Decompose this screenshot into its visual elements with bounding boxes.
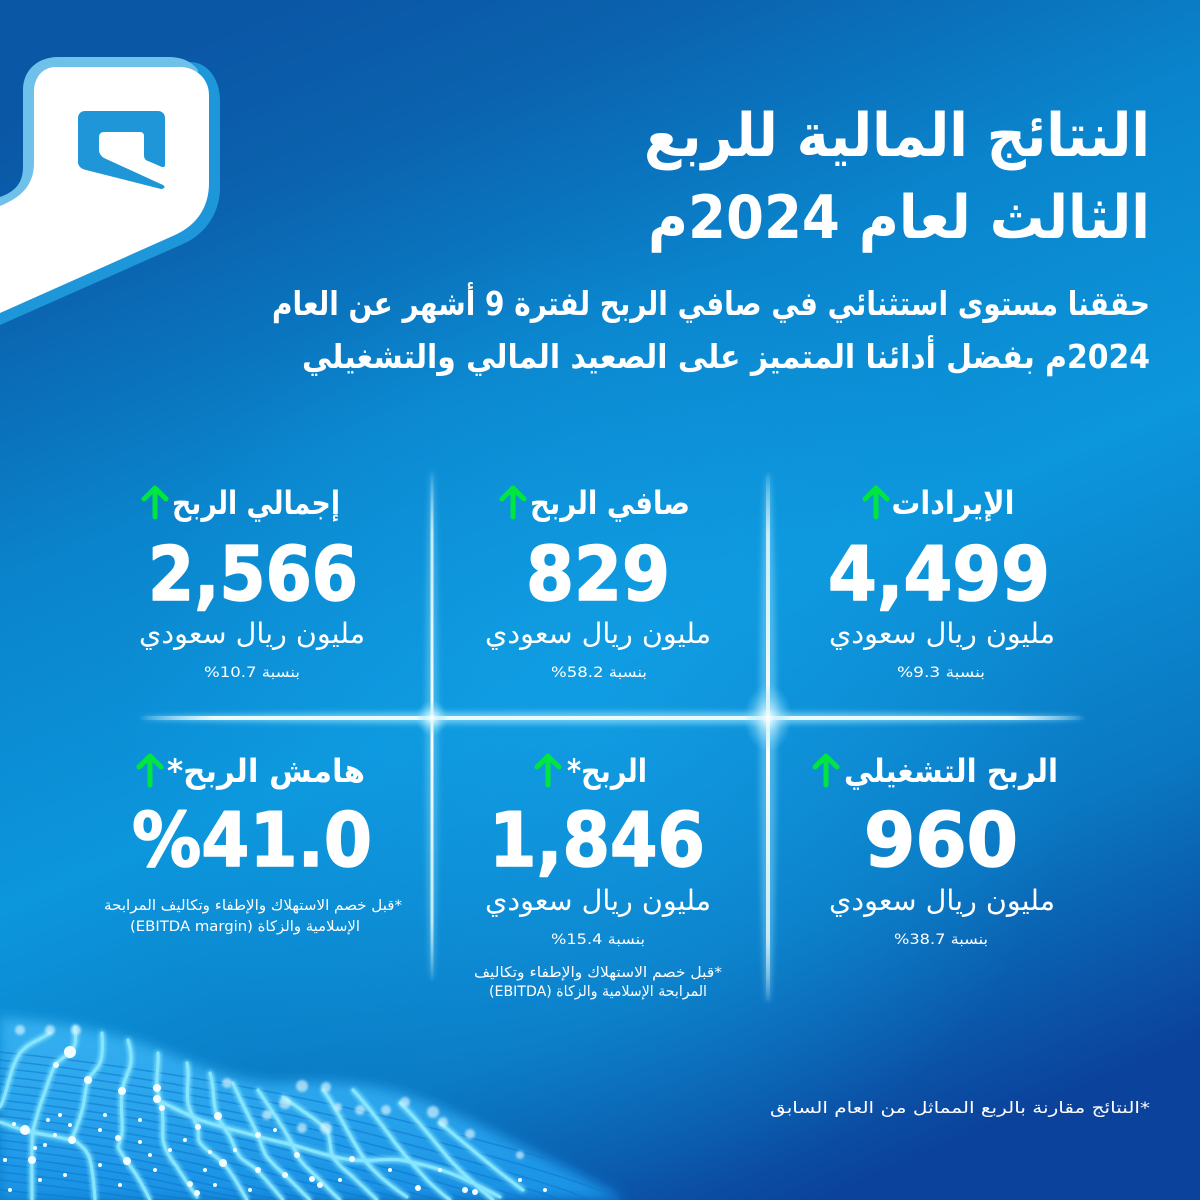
panel: EBITDA xyxy=(474,752,722,1000)
panel: EBITDA: مليون ريال سعودي xyxy=(485,884,711,917)
icon: up arrow xyxy=(537,756,559,785)
panel: net profit: صافي الربح xyxy=(530,484,690,522)
bottom note: *النتائج مقارنة بالربع المماثل من العام السابق xyxy=(770,1098,1150,1118)
panel: net profit: مليون ريال سعودي xyxy=(485,617,711,650)
panel: gross profit: مليون ريال سعودي xyxy=(139,617,365,650)
logo back band dark xyxy=(0,62,220,325)
icon: up arrow xyxy=(502,488,524,517)
panel: revenue: بنسبة 9.3% xyxy=(897,665,985,681)
title: النتائج المالية للربع xyxy=(644,101,1150,171)
title xyxy=(644,101,1150,253)
logo xyxy=(0,57,220,325)
glowing grid lines xyxy=(138,470,1086,1003)
subtitle: 2024م بفضل أدائنا المتميز على الصعيد المالي والتشغيلي xyxy=(302,335,1150,377)
logo white shape xyxy=(0,67,209,313)
panel: operating profit: 960 xyxy=(864,796,1018,884)
panel: operating profit xyxy=(815,752,1058,948)
panel: operating profit: مليون ريال سعودي xyxy=(829,884,1055,917)
icon: up arrow xyxy=(815,756,837,785)
icon: up arrow xyxy=(865,488,887,517)
panel: net profit xyxy=(485,484,711,681)
margin footnote xyxy=(104,898,402,935)
decorative data wave xyxy=(0,1017,660,1200)
margin footnote: *قبل خصم الاستهلاك والإطفاء وتكاليف المرابحة xyxy=(104,898,402,914)
panel: revenue xyxy=(828,484,1055,681)
margin footnote: الإسلامية والزكاة (EBITDA margin) xyxy=(130,919,360,935)
panel: operating profit: الربح التشغيلي xyxy=(844,752,1058,790)
panel: operating profit: بنسبة 38.7% xyxy=(894,932,988,948)
title: الثالث لعام 2024م xyxy=(648,183,1150,253)
panel: revenue: مليون ريال سعودي xyxy=(829,617,1055,650)
panel: EBITDA: 1,846 xyxy=(489,796,705,884)
panel: revenue: الإيرادات xyxy=(892,484,1014,522)
panel: EBITDA margin: %41.0 xyxy=(132,796,372,884)
panel: gross profit xyxy=(139,484,365,681)
panel: net profit: 829 xyxy=(526,530,670,618)
panel: gross profit: 2,566 xyxy=(148,530,358,618)
panel: EBITDA: الربح* xyxy=(567,752,647,790)
logo icon xyxy=(78,111,165,189)
panel: gross profit: بنسبة 10.7% xyxy=(204,665,300,681)
EBITDA footnote: المرابحة الإسلامية والزكاة (EBITDA) xyxy=(489,984,707,1000)
icon: up arrow xyxy=(144,488,166,517)
panel: net profit: بنسبة 58.2% xyxy=(551,665,647,681)
panel: EBITDA margin: هامش الربح* xyxy=(167,752,365,790)
EBITDA footnote xyxy=(474,965,722,1000)
panel: revenue: 4,499 xyxy=(828,530,1050,618)
logo back band light xyxy=(0,57,198,225)
panel: EBITDA: بنسبة 15.4% xyxy=(551,932,645,948)
panel: gross profit: إجمالي الربح xyxy=(172,484,340,523)
subtitle xyxy=(272,282,1150,377)
panel: EBITDA margin xyxy=(104,752,402,935)
EBITDA footnote: *قبل خصم الاستهلاك والإطفاء وتكاليف xyxy=(474,965,722,981)
icon: up arrow xyxy=(139,756,161,785)
